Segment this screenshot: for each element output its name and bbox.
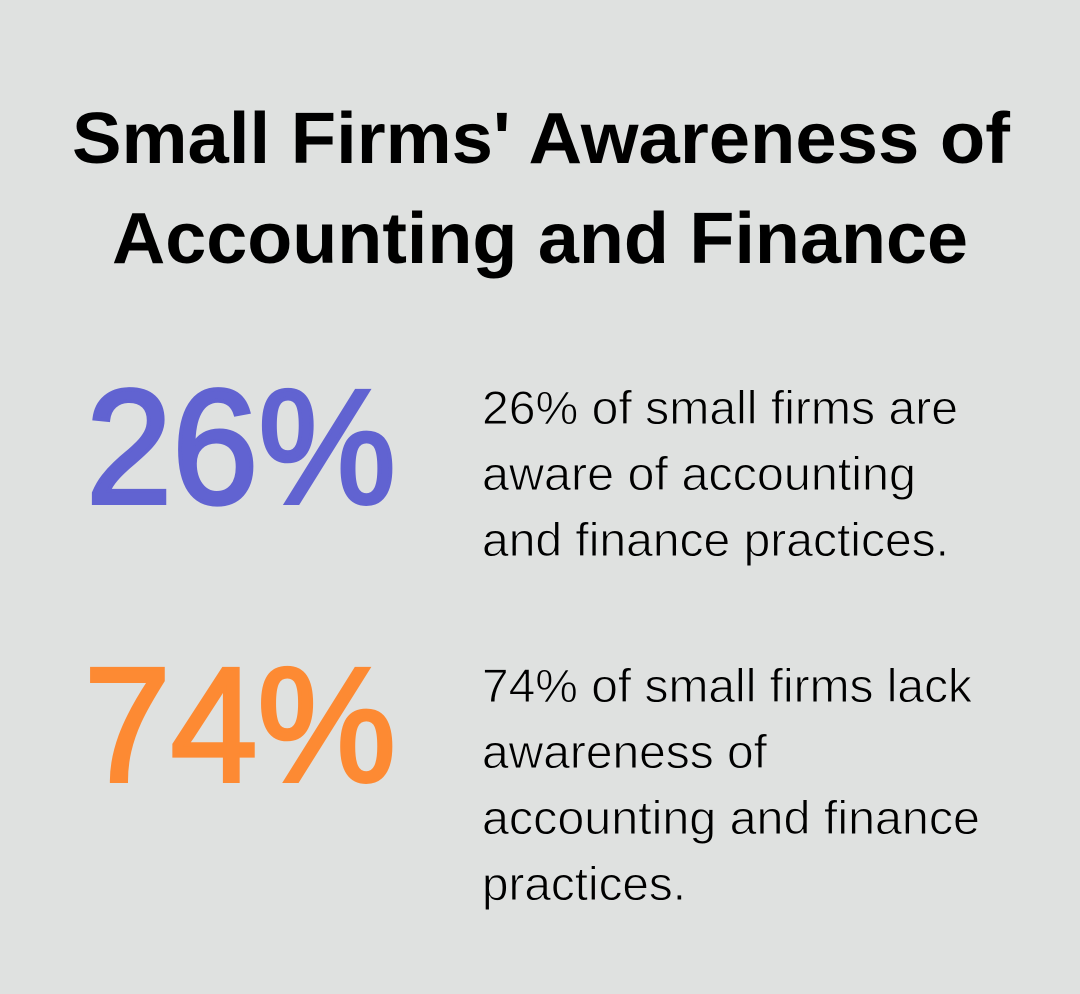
text block: 74% description: accounting and finance (482, 791, 980, 844)
text block: 74% description: practices. (482, 857, 686, 910)
statistic: 74%: 74% (84, 633, 396, 816)
text block: 26% description: and finance practices. (482, 513, 949, 566)
text block: 26% description (482, 381, 958, 566)
text block: 74% description: 74% of small firms lack (482, 659, 973, 712)
title: Accounting and Finance (112, 199, 968, 279)
text block: 74% description: awareness of (482, 725, 768, 778)
text block: 26% description: aware of accounting (482, 447, 916, 500)
statistic: 26%: 26% (86, 355, 396, 538)
title (72, 99, 1011, 279)
text block: 74% description (482, 659, 980, 910)
text block: 26% description: 26% of small firms are (482, 381, 958, 434)
title: Small Firms' Awareness of (72, 99, 1011, 179)
